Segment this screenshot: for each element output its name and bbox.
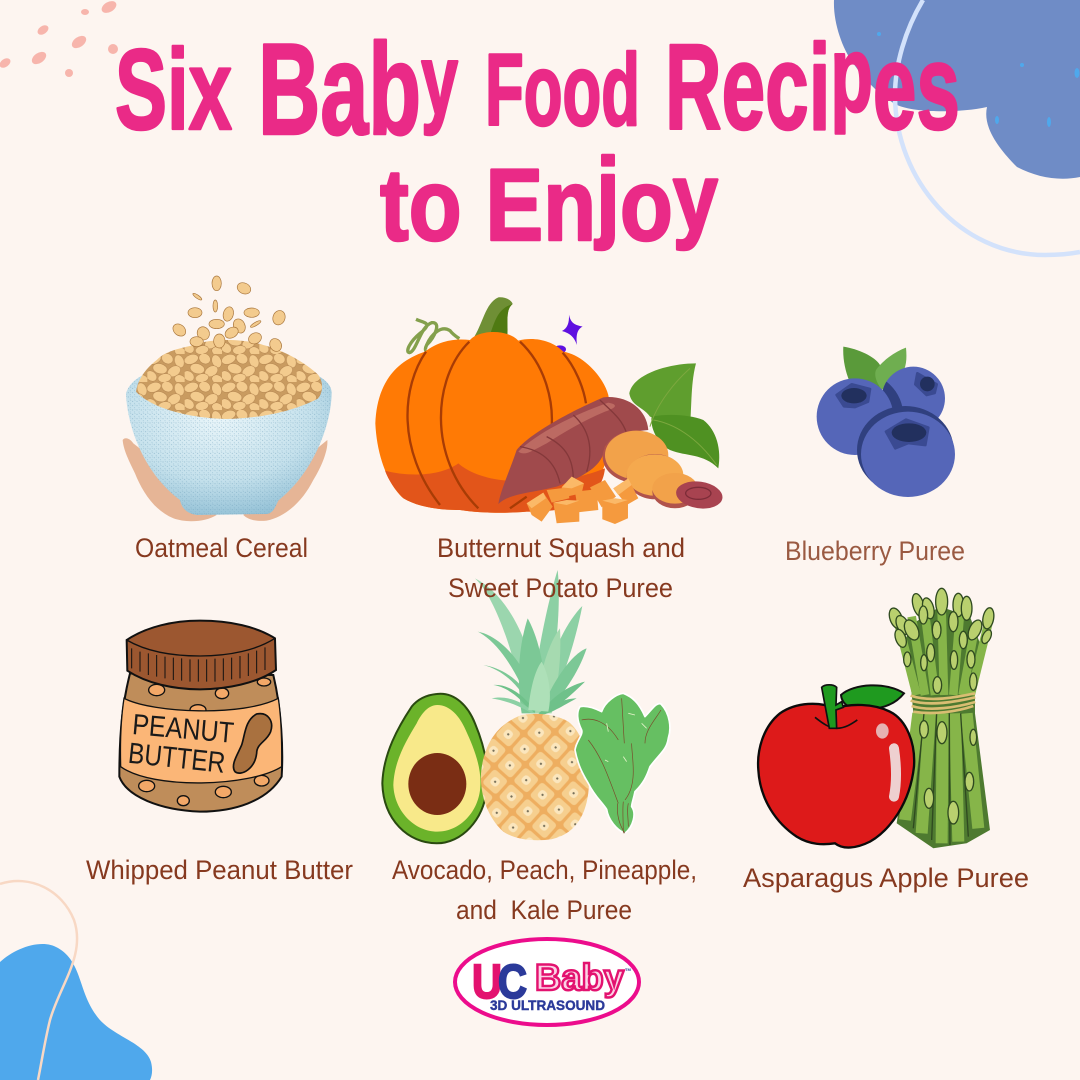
label: oatmeal cereal: Oatmeal Cereal <box>135 533 308 563</box>
title: to En <box>380 148 635 262</box>
leaves <box>629 363 696 421</box>
logo: UC Baby 3D Ultrasound <box>455 939 639 1025</box>
decorative blue blob, bottom left <box>0 944 152 1080</box>
asparagus spears <box>905 713 978 843</box>
apple highlights <box>876 723 889 739</box>
pumpkin shadow <box>385 463 605 513</box>
big berry <box>861 412 955 497</box>
apple dimple <box>815 717 857 728</box>
apple stem <box>822 685 843 728</box>
title: Six <box>115 27 232 154</box>
bowl <box>126 375 332 515</box>
title: j <box>594 137 620 251</box>
logo: UC Baby 3D Ultrasound: Baby <box>535 957 624 998</box>
berry crowns <box>837 373 937 448</box>
jar body <box>119 673 282 812</box>
label: butternut squash and sweet potato puree <box>437 533 685 603</box>
back right berry <box>882 367 945 430</box>
icon: pumpkin and sweet potato <box>375 297 724 524</box>
label: butternut squash and sweet potato puree: Butternut Squash and <box>437 533 685 563</box>
asparagus tips <box>887 588 995 824</box>
sweet potato slices <box>603 431 667 483</box>
label: avocado, peach, pineapple, and kale puree: and Kale Puree <box>456 895 632 925</box>
title <box>115 13 960 262</box>
icon: peanut butter jar: BUTTER <box>127 737 227 780</box>
icon: kale <box>575 693 670 833</box>
logo: UC Baby 3D Ultrasound: TM <box>625 967 631 972</box>
left berry <box>817 378 893 455</box>
jar lid <box>127 621 276 689</box>
title: es <box>873 19 960 155</box>
blob speckles <box>877 32 1080 127</box>
title: Food <box>485 33 640 147</box>
title: p <box>830 13 873 134</box>
flying oat flakes <box>171 276 287 354</box>
title: y <box>421 24 458 136</box>
icon: apple and asparagus <box>758 588 995 848</box>
title: o <box>620 148 673 262</box>
pumpkin body <box>375 332 611 513</box>
label: whipped peanut butter: Whipped Peanut Butter <box>86 855 353 885</box>
pumpkin ribs <box>408 342 586 508</box>
logo: UC Baby 3D Ultrasound: U <box>472 956 502 1009</box>
title: Reci <box>665 19 923 155</box>
sparkles <box>562 315 583 345</box>
oats mound <box>136 340 322 419</box>
logo: UC Baby 3D Ultrasound: 3D ULTRASOUND <box>490 998 605 1013</box>
sweet potato cubes <box>527 477 638 524</box>
pineapple body <box>481 714 589 840</box>
label: butternut squash and sweet potato puree: Sweet Potato Puree <box>448 573 673 603</box>
apple body <box>758 704 914 848</box>
sweet potato <box>498 397 648 504</box>
twine <box>911 693 975 713</box>
stem <box>473 297 513 339</box>
big berry shadow <box>857 406 954 494</box>
title: y <box>673 144 718 251</box>
jar peanut bits <box>139 678 271 806</box>
decorative ring, bottom left <box>0 881 77 1080</box>
title: Bab <box>258 16 504 162</box>
icon: peanut butter jar: PEANUT <box>131 708 235 750</box>
label: avocado, peach, pineapple, and kale puree: Avocado, Peach, Pineapple, <box>392 855 697 885</box>
label: asparagus apple puree: Asparagus Apple Puree <box>743 863 1029 893</box>
icon: peanut butter jar <box>119 621 282 812</box>
icon: oatmeal bowl <box>123 276 332 521</box>
decorative blue blob, top right <box>834 0 1080 179</box>
icon: avocado <box>382 694 488 843</box>
asparagus bunch silhouette <box>897 607 990 848</box>
hands holding bowl <box>123 438 217 521</box>
berry leaves <box>843 347 882 390</box>
pineapple crown <box>475 570 587 715</box>
jar label <box>120 698 282 783</box>
logo: UC Baby 3D Ultrasound: C <box>498 956 527 1009</box>
icon: blueberries <box>813 347 955 497</box>
decorative ring, top right <box>895 0 1080 255</box>
icon: pineapple <box>475 570 589 840</box>
peanut <box>233 714 272 773</box>
apple leaf <box>841 685 904 709</box>
tendril <box>408 319 459 353</box>
label: blueberry puree: Blueberry Puree <box>785 536 965 566</box>
label: avocado, peach, pineapple, and kale puree <box>392 855 697 925</box>
decorative pink dots, top left <box>0 0 118 77</box>
